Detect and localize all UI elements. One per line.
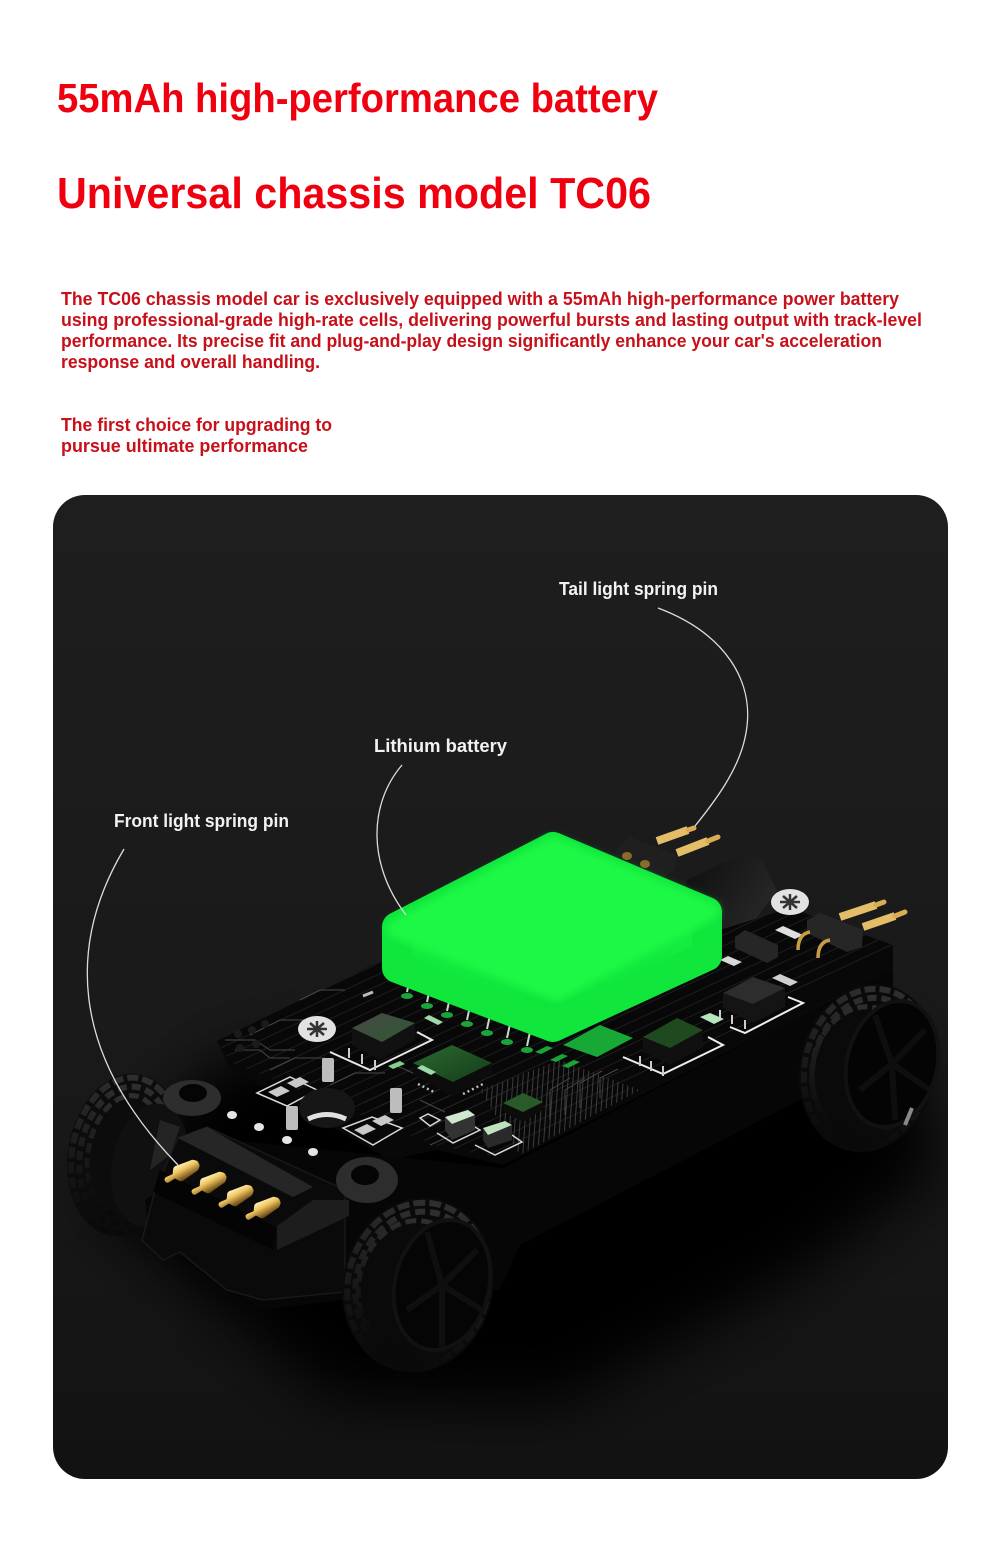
- circuit board: [217, 912, 893, 1156]
- title line 1: 55mAh high-performance battery: [57, 75, 658, 121]
- mount hole right: [336, 1157, 398, 1203]
- chip: center green: [413, 1045, 492, 1097]
- rear left wheel: [67, 1074, 186, 1232]
- leader line: tail light: [658, 608, 748, 826]
- round pad with white arc: [299, 1088, 355, 1128]
- rear connector with pins top: [622, 826, 720, 868]
- white solder dots: [227, 1111, 318, 1156]
- gold front spring pins: [164, 1160, 280, 1220]
- small components: [363, 926, 803, 1075]
- screw left: [298, 1016, 336, 1042]
- text block: upgrade note: The first choice for upgrading to: [61, 414, 332, 435]
- green pads: [535, 1046, 580, 1068]
- label: front light spring pin: Front light spring pin: [114, 811, 289, 831]
- outlined component pairs: [257, 1077, 522, 1155]
- chip: front middle: [623, 1018, 723, 1076]
- chassis body: [145, 968, 893, 1216]
- rear cylinder behind battery: [686, 878, 777, 923]
- chip: flat green: [563, 1025, 633, 1057]
- text block: description: response and overall handling.: [61, 351, 320, 372]
- label: lithium battery: Lithium battery: [374, 736, 507, 756]
- text block: upgrade note: pursue ultimate performance: [61, 435, 308, 456]
- rear connector with pins right: [798, 902, 905, 958]
- text block: description: using professional-grade high-rate cells, delivering powerful bursts and lasting output with track-level: [61, 309, 922, 330]
- screw right: [771, 889, 809, 915]
- silver capacitors: [286, 1058, 402, 1130]
- infographic canvas: [53, 82, 948, 1479]
- text block: description: performance. Its precise fit and plug-and-play design significantly enhance your car's acceleration: [61, 330, 882, 351]
- green-top capacitors: [445, 1110, 512, 1148]
- leader line: lithium battery: [377, 765, 406, 915]
- rear right wheel: [801, 986, 936, 1152]
- front right wheel: [342, 1200, 493, 1368]
- panel: dark product panel: [53, 495, 955, 1479]
- leader line: front light: [87, 849, 178, 1165]
- text block: description: [61, 288, 922, 372]
- mount hole left: [163, 1080, 221, 1116]
- battery pins row: [401, 988, 533, 1053]
- car illustration: [55, 828, 955, 1389]
- chip: small green: [503, 1093, 543, 1122]
- text block: description: The TC06 chassis model car is exclusively equipped with a 55mAh high-performance power battery: [61, 288, 900, 309]
- title line 2: Universal chassis model TC06: [57, 169, 651, 218]
- chip: left: [330, 1013, 432, 1070]
- chip: front right: [720, 977, 803, 1033]
- car shadow: [90, 1000, 940, 1405]
- battery: [396, 846, 710, 1027]
- text block: upgrade note: [61, 414, 332, 456]
- chip: rear right: [735, 930, 778, 963]
- label: tail light spring pin: Tail light spring pin: [559, 579, 718, 599]
- nose with pin housing: [142, 1120, 349, 1300]
